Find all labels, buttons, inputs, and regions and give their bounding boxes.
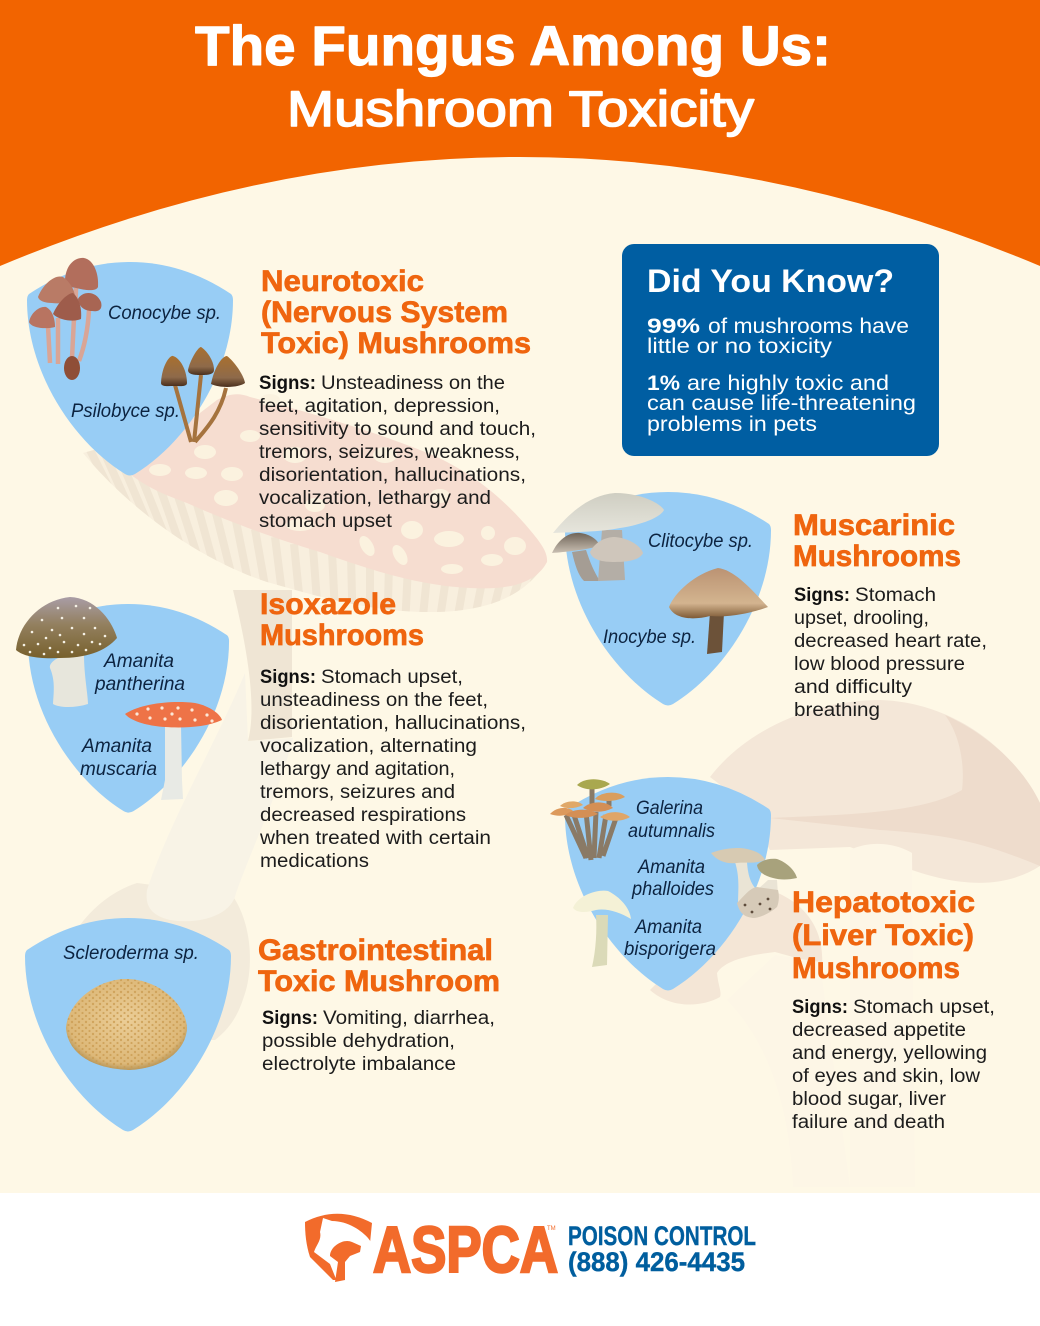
label: Amanita muscaria: Amanita xyxy=(81,736,152,757)
panel: hepatotoxic text xyxy=(792,886,995,1133)
icon: Conocybe mushrooms xyxy=(29,258,101,380)
text: isoxazole signs: Signs: xyxy=(260,667,316,688)
label: Galerina autumnalis: Galerina xyxy=(636,798,703,819)
text: neurotoxic signs: Unsteadiness on the xyxy=(321,373,505,394)
label: Amanita muscaria xyxy=(80,736,157,780)
text: 99 percent fact: of mushrooms have xyxy=(708,315,909,338)
icon: Amanita phalloides xyxy=(711,848,797,918)
heading: muscarinic xyxy=(793,509,961,573)
label: Galerina autumnalis xyxy=(628,798,715,842)
text: 1 percent fact: can cause life-threatening xyxy=(647,392,916,415)
icon: Amanita pantherina xyxy=(16,597,117,707)
icon: Amanita bisporigera xyxy=(573,891,631,967)
icon: ASPCA shield xyxy=(305,1214,374,1284)
heading: muscarinic: Mushrooms xyxy=(793,540,961,573)
text: gastrointestinal signs: possible dehydration, xyxy=(262,1031,455,1052)
title xyxy=(195,14,831,137)
text: isoxazole signs: disorientation, hallucinations, xyxy=(260,713,526,734)
heading: neurotoxic xyxy=(261,265,531,360)
text: 99 percent fact: little or no toxicity xyxy=(647,335,833,358)
panel: neurotoxic species xyxy=(27,258,245,476)
label: Amanita phalloides xyxy=(631,857,714,900)
text: neurotoxic signs: Signs: xyxy=(259,373,316,394)
footer logo xyxy=(305,1213,756,1286)
text: muscarinic signs: breathing xyxy=(794,700,880,721)
text: neurotoxic signs: feet, agitation, depression, xyxy=(259,396,500,417)
text: hepatotoxic signs: of eyes and skin, low xyxy=(792,1066,980,1087)
label: Psilobyce: Psilobyce sp. xyxy=(71,401,180,422)
text: 1 percent fact: 1% xyxy=(647,372,680,395)
text: muscarinic signs: Signs: xyxy=(794,585,850,606)
text: hepatotoxic signs xyxy=(792,997,995,1133)
label: Inocybe: Inocybe sp. xyxy=(603,627,696,648)
text: 99 percent fact xyxy=(647,315,909,358)
label: Amanita pantherina: Amanita xyxy=(103,651,174,672)
text: muscarinic signs: and difficulty xyxy=(794,677,913,698)
text: neurotoxic signs: sensitivity to sound and touch, xyxy=(259,419,536,440)
text: 1 percent fact: problems in pets xyxy=(647,413,817,436)
text: muscarinic signs: upset, drooling, xyxy=(794,608,929,629)
label: Amanita bisporigera: bisporigera xyxy=(624,939,716,960)
panel: neurotoxic text xyxy=(259,265,536,532)
label: Amanita muscaria: muscaria xyxy=(80,759,157,780)
panel: gastrointestinal species xyxy=(25,918,231,1132)
heading: hepatotoxic: (Liver Toxic) xyxy=(792,919,974,952)
text: 1 percent fact: are highly toxic and xyxy=(687,372,889,395)
panel: muscarinic text xyxy=(793,509,987,721)
heading: muscarinic: Muscarinic xyxy=(793,509,955,542)
label: Amanita phalloides: phalloides xyxy=(631,879,714,900)
panel: did you know xyxy=(622,244,939,456)
heading: did you know: Did You Know? xyxy=(647,263,894,299)
icon: Scleroderma xyxy=(66,979,187,1070)
panel: muscarinic species xyxy=(552,492,771,706)
heading: gastrointestinal: Gastrointestinal xyxy=(258,934,493,967)
phone number: (888) 426-4435 xyxy=(568,1247,745,1277)
text: gastrointestinal signs: electrolyte imbalance xyxy=(262,1054,456,1075)
heading: hepatotoxic: Mushrooms xyxy=(792,952,960,985)
text: hepatotoxic signs: and energy, yellowing xyxy=(792,1043,987,1064)
text: hepatotoxic signs: Stomach upset, xyxy=(853,997,995,1018)
text: isoxazole signs: lethargy and agitation, xyxy=(260,759,455,780)
panel: hepatotoxic species xyxy=(550,777,797,990)
heading: isoxazole: Isoxazole xyxy=(260,588,396,621)
title: Mushroom Toxicity xyxy=(287,81,754,137)
text: isoxazole signs: decreased respirations xyxy=(260,805,466,826)
label: Clitocybe: Clitocybe sp. xyxy=(648,531,753,552)
text: gastrointestinal signs xyxy=(262,1008,495,1075)
background illustration: right mushrooms xyxy=(650,700,1040,1187)
heading: neurotoxic: Neurotoxic xyxy=(261,265,424,298)
label: Amanita phalloides: Amanita xyxy=(637,857,705,878)
heading: neurotoxic: Toxic) Mushrooms xyxy=(261,327,531,360)
background illustration: spotted mushroom xyxy=(80,394,548,1040)
heading: hepatotoxic: Hepatotoxic xyxy=(792,886,975,919)
label: Scleroderma: Scleroderma sp. xyxy=(63,943,199,964)
logo wordmark: ASPCA xyxy=(373,1213,558,1286)
label: Conocybe: Conocybe sp. xyxy=(108,303,221,324)
icon: Inocybe mushroom xyxy=(669,568,768,654)
heading: neurotoxic: (Nervous System xyxy=(261,296,508,329)
heading: gastrointestinal xyxy=(258,934,500,998)
label: Amanita bisporigera: Amanita xyxy=(634,917,702,938)
text: isoxazole signs: Stomach upset, xyxy=(321,667,463,688)
trademark: TM xyxy=(547,1226,556,1232)
text: muscarinic signs: low blood pressure xyxy=(794,654,965,675)
text: hepatotoxic signs: failure and death xyxy=(792,1112,945,1133)
text: muscarinic signs xyxy=(794,585,987,721)
label: Amanita pantherina: pantherina xyxy=(94,674,185,695)
text: isoxazole signs: medications xyxy=(260,851,369,872)
header band xyxy=(0,0,1040,266)
text: hepatotoxic signs: Signs: xyxy=(792,997,848,1018)
heading: isoxazole: Mushrooms xyxy=(260,619,424,652)
text: neurotoxic signs xyxy=(259,373,536,532)
text: neurotoxic signs: tremors, seizures, weakness, xyxy=(259,442,520,463)
text: neurotoxic signs: vocalization, lethargy and xyxy=(259,488,491,509)
text: hepatotoxic signs: blood sugar, liver xyxy=(792,1089,947,1110)
label: Amanita pantherina xyxy=(94,651,185,695)
text: isoxazole signs: when treated with certain xyxy=(259,828,491,849)
heading: isoxazole xyxy=(260,588,424,652)
icon: Psilocybe mushrooms xyxy=(161,347,245,442)
text: isoxazole signs xyxy=(259,667,526,872)
text: isoxazole signs: vocalization, alternating xyxy=(260,736,477,757)
text: isoxazole signs: tremors, seizures and xyxy=(260,782,455,803)
text: muscarinic signs: Stomach xyxy=(855,585,936,606)
label: Amanita bisporigera xyxy=(624,917,716,960)
text: neurotoxic signs: disorientation, hallucinations, xyxy=(259,465,526,486)
heading: hepatotoxic xyxy=(792,886,975,985)
text: muscarinic signs: decreased heart rate, xyxy=(794,631,987,652)
panel: gastrointestinal text xyxy=(258,934,500,1075)
icon: Amanita muscaria xyxy=(125,702,222,800)
footer band xyxy=(0,1193,1040,1326)
text: 1 percent fact xyxy=(647,372,916,436)
icon: Clitocybe mushrooms xyxy=(552,493,664,581)
icon: Galerina cluster xyxy=(550,779,630,860)
text: isoxazole signs: unsteadiness on the feet, xyxy=(260,690,488,711)
panel: isoxazole species xyxy=(16,597,229,813)
panel: isoxazole text xyxy=(259,588,526,872)
text: gastrointestinal signs: Vomiting, diarrhea, xyxy=(323,1008,495,1029)
label: Galerina autumnalis: autumnalis xyxy=(628,821,715,842)
text: gastrointestinal signs: Signs: xyxy=(262,1008,318,1029)
text: 99 percent fact: 99% xyxy=(647,315,700,338)
text: hepatotoxic signs: decreased appetite xyxy=(792,1020,966,1041)
text: neurotoxic signs: stomach upset xyxy=(259,511,393,532)
poison control name: POISON CONTROL xyxy=(568,1221,756,1251)
heading: gastrointestinal: Toxic Mushroom xyxy=(258,965,500,998)
title: The Fungus Among Us: xyxy=(195,14,831,77)
